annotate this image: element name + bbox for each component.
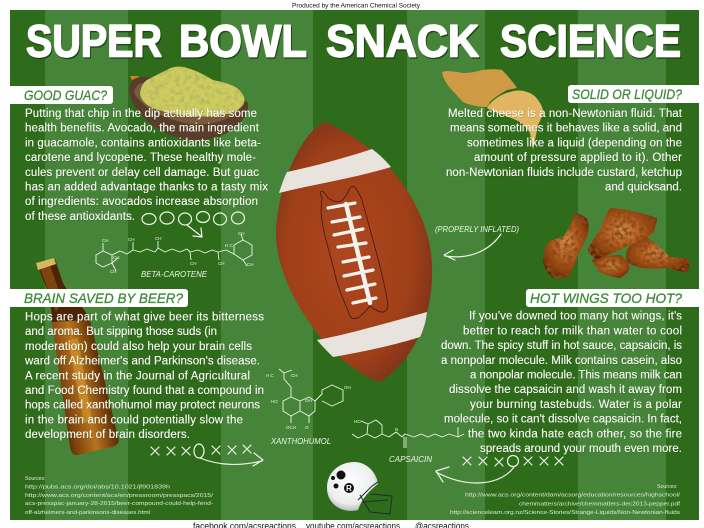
text block: hot wings too hot: spreads around your mouth even more. [480, 443, 682, 455]
text block: brain saved by beer: A recent study in the Journal of Agricultural [25, 370, 250, 382]
text block: solid or liquid [446, 108, 683, 194]
text block: brain saved by beer: development of brain disorders. [25, 429, 190, 441]
text block: brain saved by beer: moderation) could also help your brain cells [25, 341, 252, 353]
title: SUPER [26, 16, 162, 66]
text block: solid or liquid: sometimes like a liquid (depending on the [467, 137, 682, 149]
text block: solid or liquid: amount of pressure applied to it). Other [474, 152, 682, 164]
football white bands [279, 149, 427, 357]
image: beer bottle [36, 258, 119, 455]
producer credit: Produced by the American Chemical Society [292, 4, 420, 10]
text block: hot wings too hot: the two kinda hate each other, so the fire [468, 428, 682, 440]
heading bar: good guac: GOOD GUAC? [24, 87, 107, 103]
molecule: capsaicin [352, 419, 464, 448]
molecule: beta-carotene: CH [247, 262, 254, 267]
sources: right [450, 484, 681, 516]
title: SCIENCE [500, 16, 681, 66]
chalk play: left Xs and O with arrow [151, 444, 263, 466]
text block: brain saved by beer: Hops are part of what give beer its bitterness [25, 312, 264, 324]
text block: brain saved by beer: hops called xanthohumol may protect neurons [25, 400, 260, 412]
sources: right: http://sciencelearn.org.nz/Science-Stories/Strange-Liquids/Non-Newtonian-fluids [450, 510, 680, 516]
sources: right: http://www.acs.org/content/dam/acsorg/education/resources/highschool/ [465, 492, 681, 498]
text block: brain saved by beer: ward off Alzheimer's and Parkinson's disease. [24, 356, 260, 368]
molecule: beta-carotene: CH [128, 237, 134, 242]
sources: right: Sources: [657, 484, 677, 490]
molecule: xanthohumol: CH [291, 373, 298, 378]
text block: solid or liquid: and quicksand. [605, 182, 682, 194]
molecule: xanthohumol [266, 369, 351, 430]
text block: hot wings too hot: dissolve the capsaicin and wash it away from [449, 384, 682, 396]
image: chicken wings [543, 208, 689, 278]
molecule: beta-carotene: H C [225, 243, 234, 248]
image: football [276, 122, 432, 382]
molecule: xanthohumol: OCH [286, 425, 296, 430]
sources: left: off-alzheimers-and-parkinsons-diseases.html [25, 510, 150, 516]
text block: hot wings too hot: a nonpolar molecule. Milk contains casein, also [441, 355, 682, 367]
label: beta-carotene: BETA-CAROTENE [141, 269, 207, 279]
molecule: xanthohumol: H C [266, 373, 274, 378]
sources: left: http://pubs.acs.org/doi/abs/10.1021/jf901839h [25, 484, 170, 490]
molecule: xanthohumol: HO [271, 399, 278, 404]
molecule: xanthohumol: OH [305, 398, 312, 403]
text block: solid or liquid: means sometimes it behaves like a solid, and [450, 123, 682, 135]
title: SNACK [326, 16, 479, 66]
molecule: beta-carotene: CH [218, 261, 224, 266]
sources: left [25, 476, 214, 516]
title [26, 16, 681, 66]
text block: good guac: of these antioxidants. [25, 211, 135, 223]
molecule: beta-carotene: CH [238, 231, 244, 236]
text block: hot wings too hot: molecule, so it can't dissolve capsaicin. In fact, [444, 414, 682, 426]
text block: good guac [25, 108, 268, 223]
text block: good guac: of ingredients: avocados increase absorption [25, 196, 258, 208]
molecule: capsaicin: HO [354, 419, 361, 424]
molecule: beta-carotene: CH [190, 261, 196, 266]
football lace outline [320, 186, 388, 319]
heading bar: brain saved by beer: BRAIN SAVED BY BEER? [24, 290, 183, 306]
sources: left: acs-presspac-january-28-2015/beer-compound-could-help-fend- [25, 501, 213, 507]
text block: brain saved by beer [24, 312, 264, 441]
text block: good guac: cules prevent or delay cell damage. But guac [25, 167, 259, 179]
text block: good guac: Putting that chip in the dip actually has some [25, 108, 257, 120]
molecule: beta-carotene [96, 231, 254, 274]
molecule: beta-carotene: CH [113, 255, 120, 260]
text block: hot wings too hot: down. The spicy stuff in hot sauce, capsaicin, is [441, 340, 682, 352]
text block: solid or liquid: non-Newtonian fluids include custard, ketchup [446, 167, 682, 179]
text block: hot wings too hot: better to reach for milk than water to cool [463, 325, 682, 337]
text block: brain saved by beer: and aroma. But sipping those suds (in [25, 326, 217, 338]
image: helmet with ACS logo [327, 462, 392, 514]
text block: brain saved by beer: and Food Chemistry found that a compound in [25, 385, 264, 397]
text block: good guac: in guacamole, contains antioxidants like beta- [25, 137, 261, 149]
label: xanthohumol: XANTHOHUMOL [270, 436, 331, 446]
chalk play: right Xs and O with arrow [436, 456, 563, 483]
text block: good guac: has an added advantage thanks to a tasty mix [25, 182, 268, 194]
sources: left: http://www.acs.org/content/acs/en/pressroom/presspacs/2015/ [25, 493, 214, 499]
football laces [328, 203, 376, 303]
image: helmet with ACS logo: R [346, 484, 352, 493]
text block: hot wings too hot: a nonpolar molecule. This means milk can [470, 370, 682, 382]
text block: good guac: health benefits. Avocado, the main ingredient [25, 123, 260, 135]
molecule: xanthohumol: O [305, 425, 309, 430]
image: bowl of guacamole [129, 67, 248, 140]
label: capsaicin: CAPSAICIN [389, 454, 433, 464]
title: BOWL [179, 16, 307, 66]
image: chip dipped in nacho cheese [442, 69, 543, 150]
molecule: beta-carotene: CH [155, 236, 162, 241]
text block: hot wings too hot: If you've downed too many hot wings, it's [469, 311, 682, 323]
chalk note: properly inflated with arrow: (PROPERLY INFLATED) [435, 224, 519, 234]
footer social links [193, 521, 469, 528]
molecule: beta-carotene: CH [102, 238, 108, 243]
text block: hot wings too hot [441, 311, 682, 455]
chalk note: properly inflated with arrow [435, 224, 519, 260]
text block: good guac: carotene and lycopene. These healthy mole- [25, 152, 256, 164]
molecule: capsaicin: N [395, 427, 398, 432]
molecule: xanthohumol: OH [344, 385, 351, 390]
text block: brain saved by beer: in the brain and could potentially slow the [25, 414, 243, 426]
chalk play: circles and arrow to beta-carotene [142, 212, 244, 237]
molecule: beta-carotene: CH [110, 269, 116, 274]
sources: left: Sources: [25, 476, 45, 482]
heading bar: hot wings too hot: HOT WINGS TOO HOT? [530, 290, 682, 306]
heading bar: solid or liquid: SOLID OR LIQUID? [572, 86, 682, 102]
text block: solid or liquid: Melted cheese is a non-Newtonian fluid. That [448, 108, 683, 120]
sources: right: chemmatters/archive/chemmatters-dec2013-pepper.pdf [519, 502, 681, 508]
text block: hot wings too hot: your burning tastebuds. Water is a polar [470, 399, 682, 411]
